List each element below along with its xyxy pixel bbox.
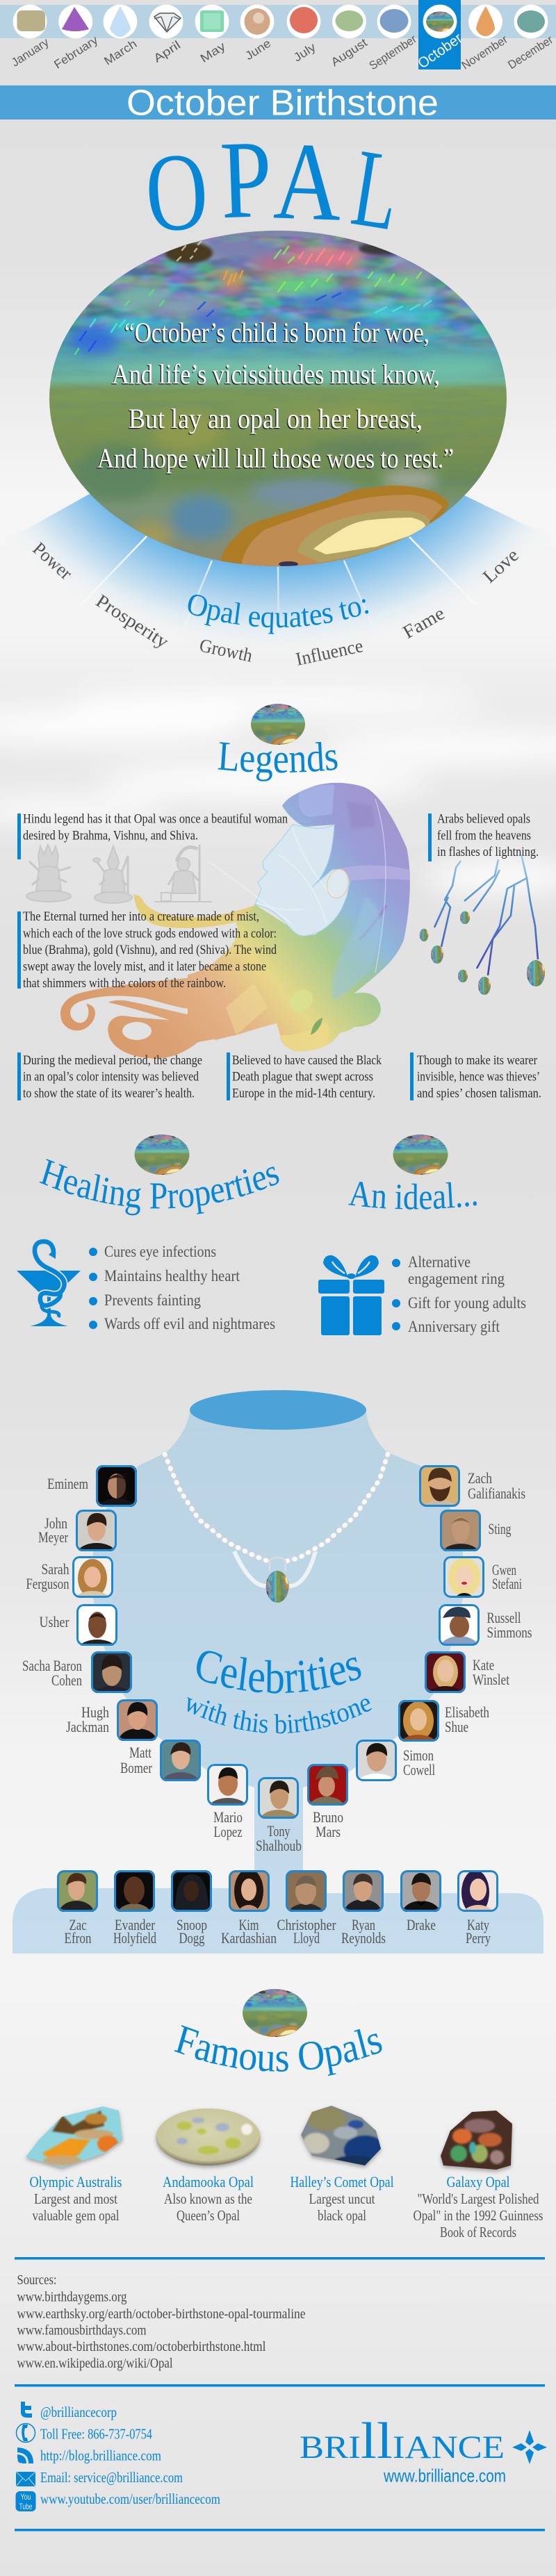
celebrity: Kate Winslet	[425, 1651, 509, 1693]
celebrity: Evander Holyfield: Holyfield	[113, 1929, 156, 1947]
famous opal: Olympic Australis: Olympic Australis	[29, 2173, 122, 2190]
logo: Brilliance: www.brilliance.com	[383, 2466, 506, 2486]
list: healing properties: Cures eye infections	[104, 1243, 216, 1260]
celebrity: Kate Winslet: Winslet	[473, 1671, 509, 1688]
celebrity: Zach Galifianakis: Galifianakis	[468, 1485, 525, 1502]
month: July	[287, 5, 320, 65]
blue fan below opal	[0, 417, 556, 695]
month: June	[240, 5, 274, 63]
celebrity: John Meyer: John	[44, 1514, 67, 1532]
month: July: July	[291, 40, 318, 65]
mannequin bust	[13, 1390, 543, 1954]
celebrity: Elisabeth Shue	[398, 1700, 489, 1742]
celebrity: Drake: Drake	[407, 1916, 436, 1933]
month: February: February	[51, 33, 101, 72]
list: ideal gifts: Alternative	[408, 1253, 471, 1271]
month: March	[101, 5, 139, 68]
famous opal: Galaxy Opal: Galaxy Opal	[446, 2173, 510, 2190]
famous opal: Galaxy Opal: Book of Records	[440, 2224, 516, 2240]
celebrity: Christopher Lloyd: Christopher	[277, 1916, 336, 1933]
list: healing properties: Prevents fainting	[104, 1291, 201, 1309]
text block: The Eternal: that shimmers with the colors of the rainbow.	[23, 976, 226, 991]
famous opal: Andamooka Opal: Also known as the	[164, 2190, 252, 2207]
famous opal: Andamooka Opal	[156, 2108, 260, 2224]
necklace with opal pendant	[165, 1454, 388, 1603]
contact: email	[16, 2469, 183, 2486]
famous opal: Andamooka Opal: Andamooka Opal	[163, 2173, 254, 2190]
famous opal: Andamooka Opal: Queen’s Opal	[177, 2207, 240, 2224]
famous opal: Halley's Comet Opal: Largest uncut	[309, 2190, 375, 2207]
celebrity: Hugh Jackman: Jackman	[66, 1718, 109, 1735]
opal virtues: Fame	[399, 602, 448, 643]
celebrity: Gwen Stefani: Gwen	[492, 1561, 516, 1578]
famous opal: Olympic Australis	[21, 2102, 125, 2224]
text block: medieval period	[17, 1052, 202, 1100]
text block: The Eternal: blue (Brahma), gold (Vishnu), and red (Shiva). The wind	[23, 943, 277, 957]
celebrity: Snoop Dogg: Dogg	[179, 1929, 204, 1947]
celebrity: Evander Holyfield	[113, 1870, 156, 1947]
celebrity: Gwen Stefani	[443, 1556, 522, 1598]
celebrity: Sarah Ferguson: Ferguson	[26, 1575, 70, 1592]
celebrity: Kim Kardashian: Kardashian	[221, 1929, 277, 1947]
celebrity: Usher	[39, 1604, 117, 1646]
celebrity: Eminem	[47, 1465, 137, 1507]
section icon: healing opal	[133, 1134, 190, 1176]
mist backdrop	[0, 688, 556, 893]
celebrity: Bruno Mars: Bruno	[313, 1808, 343, 1826]
opal virtues: Power	[28, 538, 76, 584]
celebrity: Matt Bomer: Bomer	[120, 1759, 153, 1776]
month: November: November	[459, 33, 510, 72]
celebrity: Russell Simmons: Simmons	[486, 1624, 532, 1641]
fan rays	[80, 536, 475, 647]
contact: twitter	[21, 2402, 117, 2420]
text block: The Eternal	[17, 909, 277, 991]
gem: Andamooka	[156, 2108, 260, 2165]
month: December	[505, 5, 555, 72]
celebrity: Russell Simmons	[439, 1604, 532, 1646]
icon: gift box	[318, 1255, 384, 1335]
list: ideal gifts: engagement ring	[408, 1270, 505, 1287]
celebrity: Sarah Ferguson: Sarah	[42, 1560, 70, 1578]
text block: Arabs: in flashes of lightning.	[437, 845, 539, 859]
god: Brahma	[26, 845, 71, 902]
contact: email: Email: service@brilliance.com	[40, 2469, 183, 2486]
heading: Opal equates to: Opal equates to:	[188, 595, 368, 634]
list: ideal gifts	[392, 1253, 526, 1335]
list: ideal gifts: Anniversary gift	[408, 1318, 500, 1335]
celebrity: Russell Simmons: Russell	[486, 1609, 521, 1626]
poem on opal	[97, 317, 454, 474]
celebrity: Christopher Lloyd	[277, 1870, 336, 1947]
month: March: March	[101, 37, 139, 68]
celebrity: John Meyer	[38, 1510, 117, 1551]
celebrity: Eminem: Eminem	[47, 1475, 88, 1492]
celebrity: Hugh Jackman: Hugh	[81, 1703, 109, 1721]
gem: Olympic Australis	[25, 2106, 124, 2172]
famous opal: Olympic Australis: valuable gem opal	[32, 2207, 120, 2224]
list: healing properties	[89, 1243, 275, 1332]
celebrity: Sacha Baron Cohen: Cohen	[51, 1671, 82, 1689]
celebrity: Mario Lopez: Lopez	[214, 1823, 243, 1840]
logo: Brilliance: BRIllIANCE	[300, 2413, 505, 2470]
text block: thieves: Though to make its wearer	[417, 1053, 538, 1068]
celebrity: Drake	[400, 1870, 441, 1933]
month: June: June	[243, 37, 273, 63]
text block: Arabs: fell from the heavens	[437, 829, 531, 843]
celebrity: Katy Perry: Perry	[466, 1929, 491, 1947]
celebrity: Ryan Reynolds: Reynolds	[341, 1929, 386, 1947]
famous opal: Halley's Comet Opal: black opal	[318, 2207, 366, 2224]
celebrity: Bruno Mars: Mars	[316, 1823, 341, 1840]
text block: medieval period: in an opal’s color intensity was believed	[23, 1070, 199, 1084]
celebrity: Kim Kardashian: Kim	[239, 1916, 259, 1933]
sources list	[17, 2272, 306, 2371]
contact: youtube: Tube	[19, 2502, 33, 2511]
celebrity: Tony Shalhoub	[256, 1777, 302, 1854]
contact: youtube: You	[21, 2492, 31, 2502]
text block: The Eternal: which each of the love struck gods endowed with a color:	[23, 926, 277, 941]
logo: Brilliance	[300, 2413, 547, 2486]
month: April	[149, 5, 183, 65]
opal virtues: Love	[479, 545, 523, 587]
celebrity: Tony Shalhoub: Tony	[267, 1822, 291, 1840]
celebrity: Simon Cowell	[356, 1740, 435, 1781]
month: January: January	[9, 35, 51, 69]
heading: OPAL: P	[218, 117, 274, 242]
month selector band	[0, 0, 556, 72]
text block: The Eternal: The Eternal turned her into a creature made of mist,	[23, 909, 259, 924]
month: April: April	[151, 38, 183, 65]
section icon: legends opal	[250, 703, 306, 746]
contact: twitter: @brilliancecorp	[40, 2404, 117, 2420]
month: February	[51, 5, 101, 72]
celebrity: Zac Efron: Efron	[64, 1929, 92, 1947]
text block: thieves	[410, 1052, 541, 1100]
month: May	[195, 5, 229, 65]
celebrity: Katy Perry	[457, 1870, 498, 1947]
text block: Hindu legend intro: Hindu legend has it that Opal was once a beautiful woman	[23, 811, 288, 827]
celebrity: Mario Lopez	[207, 1764, 248, 1840]
celebrity: Katy Perry: Katy	[467, 1916, 489, 1933]
celebrity: Simon Cowell: Cowell	[403, 1761, 435, 1778]
celebrity: Matt Bomer	[121, 1740, 201, 1781]
sources list: www.earthsky.org/earth/october-birthstone-opal-tourmaline	[17, 2306, 306, 2322]
text block: Arabs: Arabs believed opals	[437, 811, 530, 827]
celebrity: Snoop Dogg	[171, 1870, 212, 1947]
poem on opal: And hope will lull those woes to rest.”	[97, 443, 454, 474]
celebrity: Evander Holyfield: Evander	[115, 1916, 156, 1933]
celebrity: Elisabeth Shue: Elisabeth	[445, 1703, 489, 1721]
contact: phone: Toll Free: 866-737-0754	[40, 2426, 152, 2443]
month: January	[9, 5, 51, 69]
celebrity: Elisabeth Shue: Shue	[445, 1718, 468, 1735]
large opal gem	[42, 222, 514, 577]
famous opal: Halley's Comet Opal: Halley’s Comet Opal	[291, 2173, 393, 2190]
celebrity: Sting: Sting	[488, 1520, 512, 1537]
poem on opal: And life’s vicissitudes must know,	[112, 358, 440, 390]
list: healing properties: Maintains healthy heart	[104, 1267, 240, 1285]
celebrity: Ryan Reynolds	[341, 1870, 386, 1947]
subheading: with this birthstone: with this birthstone	[187, 1696, 372, 1734]
celebrity: Zac Efron: Zac	[70, 1916, 87, 1933]
sources list: Sources:	[17, 2272, 57, 2288]
month: October (selected)	[415, 5, 465, 72]
heading: OPAL: L	[345, 126, 407, 254]
section icon: ideal opal	[392, 1134, 449, 1176]
text block: medieval period: During the medieval period, the change	[23, 1053, 202, 1068]
title band: October Birthstone: October Birthstone	[126, 83, 439, 124]
heading: Celebrities: Celebrities	[197, 1651, 361, 1694]
poem on opal: But lay an opal on her breast,	[129, 403, 423, 434]
sources list: www.about-birthstones.com/octoberbirthstone.html	[17, 2339, 266, 2354]
month: May: May	[198, 40, 228, 65]
sources list: www.birthdaygems.org	[17, 2290, 126, 2305]
contact: blog: http://blog.brilliance.com	[40, 2447, 161, 2464]
month: November	[459, 5, 510, 72]
celebrity: Kate Winslet: Kate	[473, 1656, 494, 1674]
contact: phone	[17, 2423, 152, 2443]
famous opal: Halley's Comet Opal	[291, 2102, 393, 2224]
celebrity: Usher: Usher	[39, 1613, 70, 1630]
gem: Galaxy	[438, 2105, 514, 2174]
text block: Hindu legend intro: desired by Brahma, Vishnu, and Shiva.	[23, 829, 198, 843]
celebrity: Snoop Dogg: Snoop	[177, 1916, 207, 1933]
celebrity: Zac Efron	[57, 1870, 98, 1947]
celebrity: Sting	[440, 1510, 512, 1551]
opal virtues: Growth	[197, 634, 254, 666]
text block: Arabs	[428, 811, 539, 861]
illustration: Hindu gods	[26, 845, 212, 903]
heading: Legends: Legends	[218, 742, 338, 782]
celebrity: Hugh Jackman	[66, 1699, 158, 1741]
heading: An ideal: An ideal...	[348, 1182, 477, 1209]
text block: Black Death: Death plague that swept across	[232, 1070, 373, 1084]
famous opal: Olympic Australis: Largest and most	[34, 2190, 117, 2207]
list: healing properties: Wards off evil and nightmares	[104, 1315, 275, 1332]
poem on opal: “October’s child is born for woe,	[124, 317, 430, 348]
opal virtues	[28, 538, 523, 670]
text block: Black Death: Europe in the mid-14th century.	[232, 1086, 375, 1100]
heading: OPAL	[142, 117, 407, 256]
illustration: rainbow-haired woman	[60, 783, 410, 1059]
celebrity: Mario Lopez: Mario	[213, 1808, 243, 1826]
illustration: lightning and falling opals	[419, 854, 546, 996]
celebrity: Kim Kardashian	[221, 1869, 277, 1947]
sources list: www.en.wikipedia.org/wiki/Opal	[17, 2356, 173, 2371]
celebrity: Sacha Baron Cohen	[23, 1651, 132, 1693]
celebrity: Matt Bomer: Matt	[129, 1744, 152, 1761]
contact: youtube: www.youtube.com/user/brilliancecom	[40, 2491, 220, 2507]
month: September	[367, 5, 419, 72]
icon: bowl of Hygieia	[17, 1241, 81, 1326]
text block: medieval period: to show the state of its wearer’s health.	[23, 1086, 195, 1100]
opal virtues: Influence	[294, 635, 365, 670]
opal virtues: Prosperity	[92, 590, 173, 652]
gem: Halley's Comet	[299, 2106, 382, 2170]
section icon: famous opals	[241, 1988, 309, 2038]
month: August	[329, 5, 370, 69]
heading: Famous Opals: Famous Opals	[174, 2025, 382, 2076]
title band: October Birthstone	[0, 83, 556, 124]
month: September: September	[367, 32, 419, 72]
god: Vishnu	[93, 846, 132, 903]
text block: Hindu legend intro	[17, 811, 288, 859]
contact: youtube	[15, 2491, 220, 2511]
celebrity: Gwen Stefani: Stefani	[492, 1575, 522, 1592]
celebrity: Ryan Reynolds: Ryan	[352, 1916, 375, 1933]
heading: OPAL: O	[142, 129, 212, 256]
celebrity: Sacha Baron Cohen: Sacha Baron	[22, 1657, 82, 1674]
celebrity: Simon Cowell: Simon	[403, 1747, 434, 1764]
celebrity: Sarah Ferguson	[26, 1556, 113, 1598]
celebrity: Zach Galifianakis	[419, 1465, 525, 1507]
celebrity: Bruno Mars	[307, 1764, 348, 1840]
celebrity: Zach Galifianakis: Zach	[468, 1469, 492, 1487]
famous opal: Galaxy Opal	[413, 2105, 543, 2240]
celebrity: Christopher Lloyd: Lloyd	[293, 1929, 320, 1947]
list: ideal gifts: Gift for young adults	[408, 1294, 526, 1312]
heading: Healing Properties: Healing Properties	[39, 1159, 279, 1216]
celebrity: John Meyer: Meyer	[38, 1528, 69, 1546]
text block: The Eternal: swept away the lovely mist, and it later became a stone	[23, 959, 266, 974]
month: October (selected): October	[415, 30, 465, 72]
text block: Black Death	[227, 1052, 382, 1100]
sources list: www.famousbirthdays.com	[17, 2323, 147, 2338]
god: Shiva	[154, 845, 212, 902]
celebrity: Tony Shalhoub: Shalhoub	[256, 1837, 302, 1854]
heading: OPAL: A	[272, 118, 343, 244]
text block: Black Death: Believed to have caused the Black	[232, 1053, 382, 1068]
month: August: August	[329, 35, 370, 69]
